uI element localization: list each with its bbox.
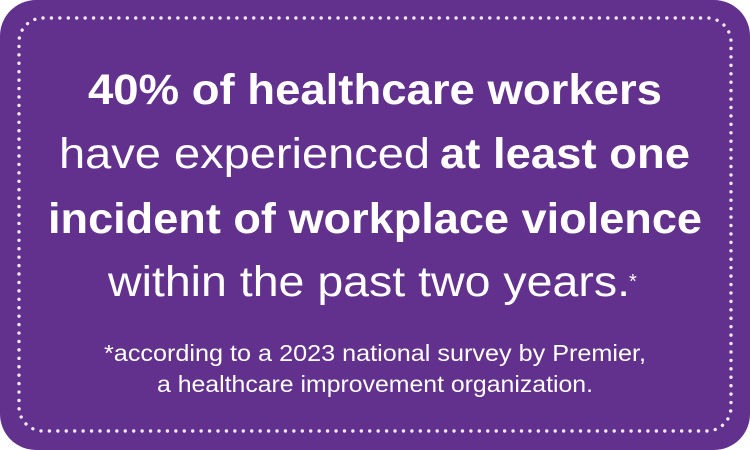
heading line 1: 40% of healthcare workers: [88, 66, 662, 114]
heading line 3: incident of workplace violence: [48, 195, 702, 243]
footnote line 1: *according to a 2023 national survey by Premier,: [104, 340, 646, 366]
heading line 4: within the past two years.: [107, 258, 630, 306]
footnote line 2: a healthcare improvement organization.: [157, 371, 593, 397]
heading line 2: bold part: at least one: [440, 130, 690, 178]
asterisk: *: [629, 271, 637, 293]
heading line 2: regular part: have experienced: [59, 130, 430, 178]
